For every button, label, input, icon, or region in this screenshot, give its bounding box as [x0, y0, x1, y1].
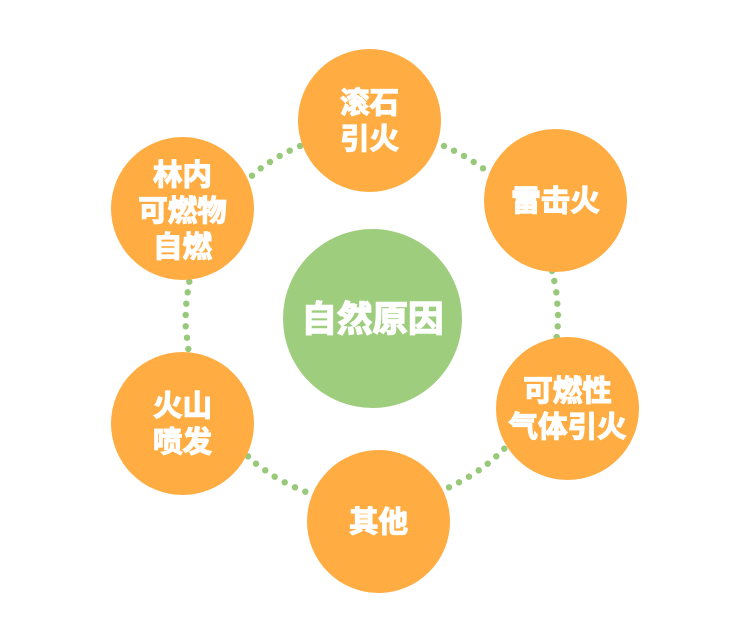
- node: lightning: 雷击火: [511, 185, 600, 218]
- dotted connector: upper left to top: [249, 143, 303, 179]
- node: flammable gas: [496, 337, 639, 480]
- dotted connector: right to lower right: [549, 268, 561, 340]
- node: forest fuel self-ignition: 林内: [153, 159, 212, 192]
- node: other: [307, 450, 450, 593]
- node: other: 其他: [349, 506, 408, 539]
- node: rolling stones: [298, 49, 441, 192]
- dotted connector: lower right to bottom: [446, 446, 507, 490]
- node: volcanic eruption: 火山: [153, 390, 212, 423]
- node: flammable gas: 可燃性: [523, 375, 612, 408]
- node: forest fuel self-ignition: 自燃: [153, 231, 212, 264]
- dotted connector: lower left to upper left: [182, 278, 192, 352]
- node: forest fuel self-ignition: [111, 137, 254, 280]
- dotted connector: top to right: [441, 143, 486, 172]
- center circle: natural causes: [283, 229, 462, 408]
- node: forest fuel self-ignition: 可燃物: [138, 195, 227, 228]
- node: lightning: [484, 129, 627, 272]
- dotted connector: bottom to lower left: [245, 453, 308, 495]
- node: flammable gas: 气体引火: [508, 411, 627, 444]
- node: rolling stones: 引火: [340, 123, 399, 156]
- node: volcanic eruption: 喷发: [153, 426, 212, 459]
- node: volcanic eruption: [111, 352, 254, 495]
- center circle: natural causes: 自然原因: [301, 299, 444, 339]
- node: rolling stones: 滚石: [340, 87, 399, 120]
